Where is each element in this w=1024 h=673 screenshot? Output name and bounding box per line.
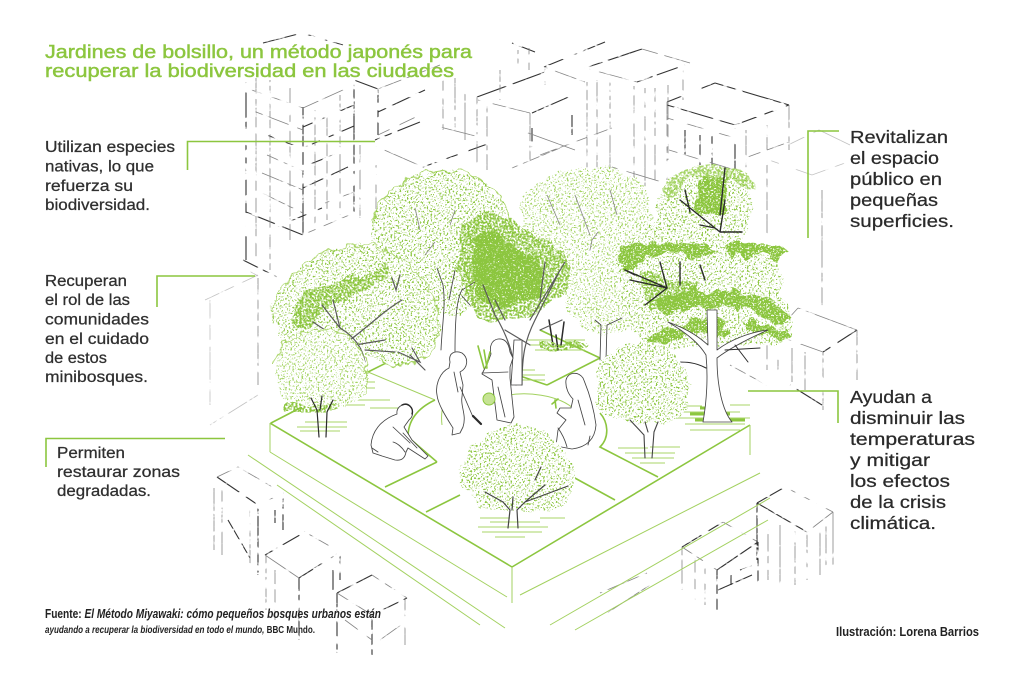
text: public space: el espacio [850, 148, 939, 168]
person: kneeling left [371, 404, 428, 460]
person: standing with plant [478, 339, 514, 423]
building: central blocks [477, 42, 789, 186]
text: public space: Revitalizan [850, 127, 948, 147]
text: temperatures: disminuir las [850, 408, 965, 428]
text: degraded areas: Permiten [57, 445, 125, 462]
text: public space: superficies. [850, 211, 954, 231]
building: second block [354, 65, 503, 230]
building: right lower block [730, 308, 857, 410]
tree: central solid green [459, 214, 570, 385]
tree: back right light canopy [520, 167, 652, 272]
tree: left round bush [274, 329, 367, 437]
tree: back right lower canopy [563, 248, 653, 360]
text: communities: comunidades [45, 312, 149, 328]
garden platform [248, 330, 770, 630]
buildings: lower row [214, 467, 833, 655]
title: Jardines de bolsillo, un método japonés para [45, 42, 473, 62]
text: communities: Recuperan [45, 273, 127, 290]
text: temperatures: los efectos [850, 471, 950, 491]
tree: back left light canopy [372, 170, 515, 352]
text: communities: el rol de las [45, 292, 130, 309]
text: native species: refuerza su [45, 178, 133, 195]
person: kneeling right [552, 373, 596, 449]
source credit: Fuente: El Método Miyawaki: cómo pequeños bosques urbanos están [45, 606, 464, 621]
text: temperatures: Ayudan a [850, 387, 932, 407]
text: native species: nativas, lo que [45, 158, 154, 176]
building: lower right one [682, 522, 758, 610]
text: native species: biodiversidad. [45, 197, 150, 214]
building: lower left three [337, 575, 407, 655]
person: bending with shovel [437, 352, 481, 435]
tree: large right layered tree [615, 166, 795, 422]
tree: left large canopy [272, 245, 440, 370]
callout lines [46, 131, 839, 467]
text: public space: pequeñas [850, 190, 938, 210]
building: right blocks [667, 83, 850, 310]
text: public space: público en [850, 169, 942, 189]
building: left tower [243, 33, 354, 277]
tree: right round bush [594, 342, 689, 458]
text: degraded areas: restaurar zonas [57, 464, 180, 481]
ground hatching under trees [297, 340, 750, 537]
text: communities: minibosques. [45, 369, 148, 386]
tree: front centre [460, 425, 575, 528]
building: lower left two [265, 532, 340, 640]
street marks [600, 573, 650, 613]
text: temperatures: temperaturas [850, 429, 975, 449]
illustration credit: Ilustración: Lorena Barrios [836, 624, 979, 639]
text: temperatures: de la crisis [850, 492, 946, 512]
text: temperatures: y mitigar [850, 450, 930, 470]
people planting [371, 339, 596, 460]
illustration [205, 33, 857, 655]
building: middle left block [205, 268, 258, 425]
title: recuperar la biodiversidad en las ciudades [45, 61, 454, 81]
source credit: ayudando a recuperar la biodiversidad en todo el mundo, BBC Mundo. [45, 624, 331, 636]
tree: small tree at back [540, 320, 585, 350]
text: native species: Utilizan especies [45, 139, 175, 156]
text: temperatures: climática. [850, 513, 936, 533]
building: lower right two [757, 487, 833, 585]
building: lower left one [214, 467, 283, 575]
text: communities: de estos [45, 350, 107, 367]
text: degraded areas: degradadas. [57, 483, 151, 500]
text: communities: en el cuidado [45, 331, 149, 348]
buildings: upper skyline [205, 33, 857, 425]
